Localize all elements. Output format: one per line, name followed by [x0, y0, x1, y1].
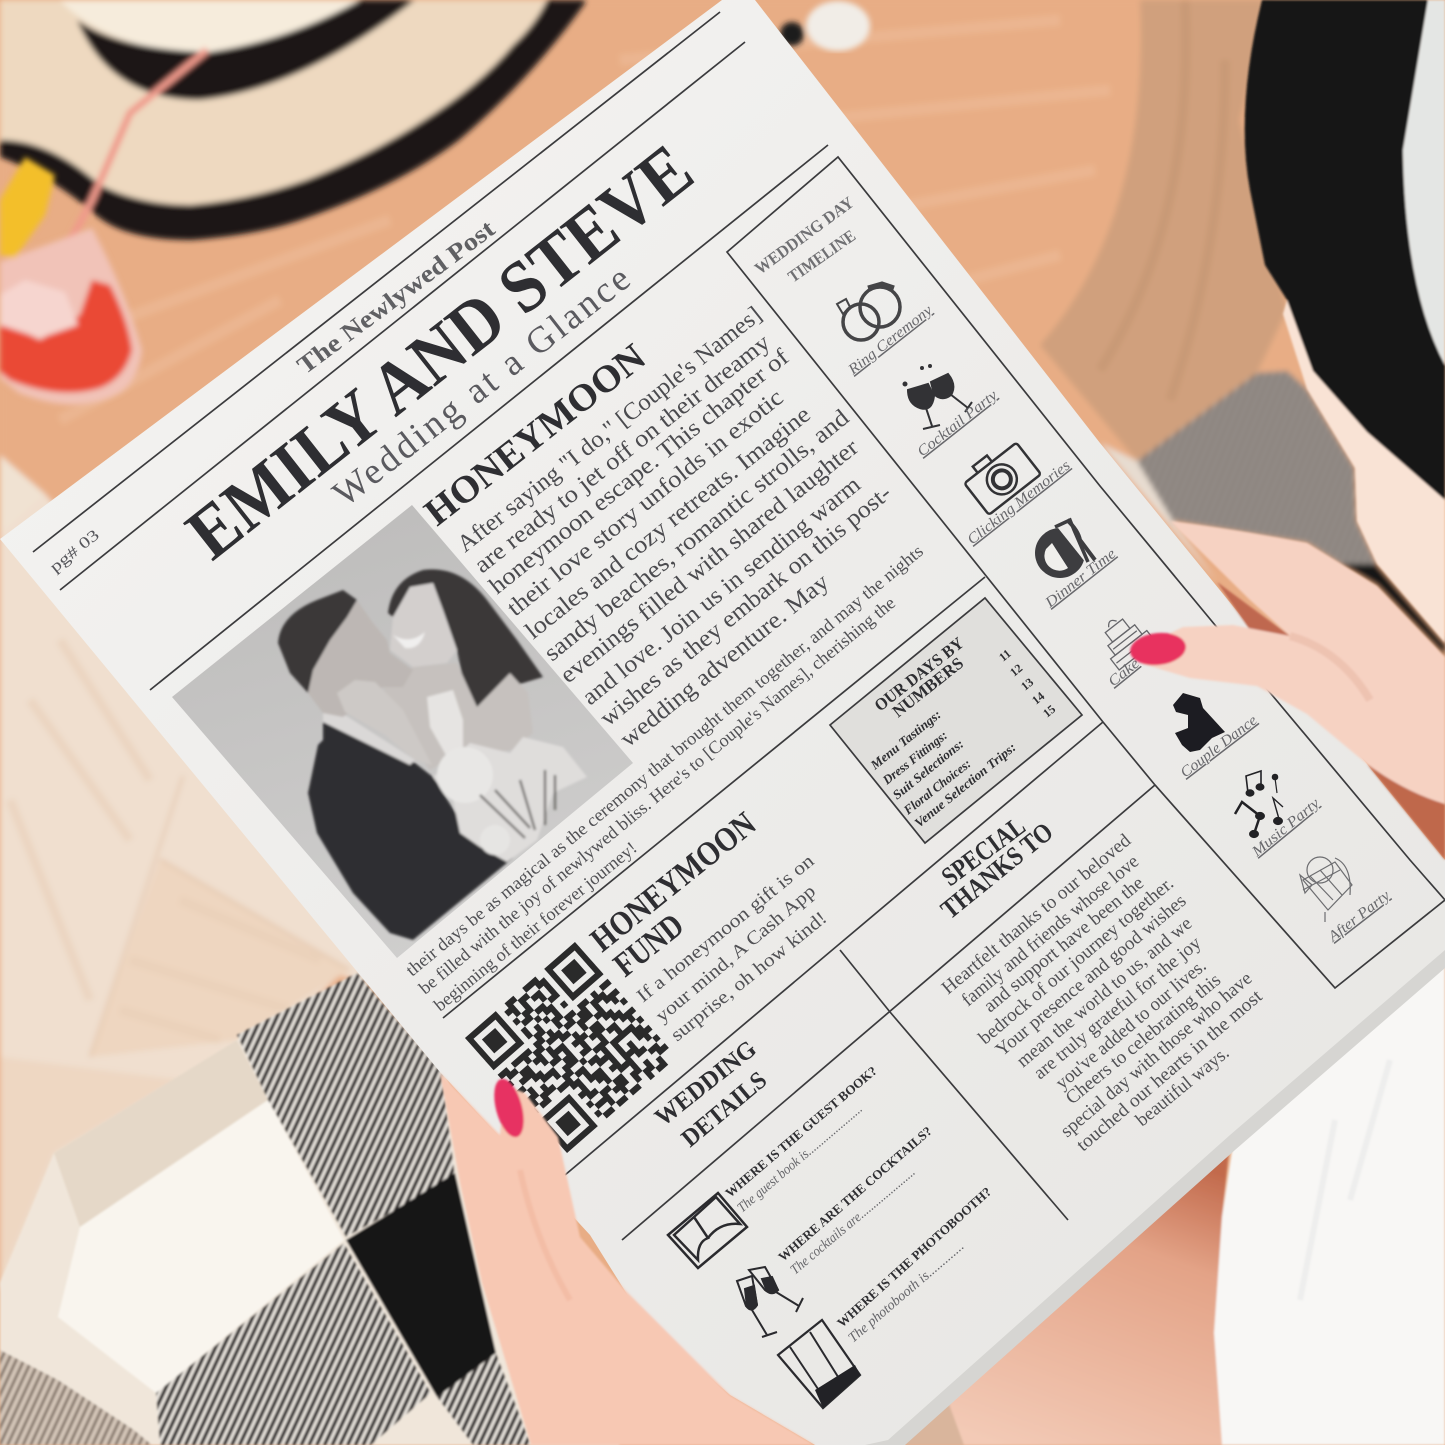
left hand with thumb — [440, 1073, 815, 1445]
cocktails item: WHERE ARE THE COCKTAILS? — [775, 1123, 935, 1264]
numbers heading: NUMBERS — [889, 654, 967, 721]
man's suit — [308, 718, 513, 940]
icon: couple dancing — [1173, 693, 1225, 752]
numbers list: 13 — [1018, 675, 1036, 693]
article text: honeymoon: evenings filled with shared laughter — [555, 435, 864, 689]
fund heading: FUND — [607, 907, 691, 984]
woman's face — [390, 583, 457, 667]
thanks text: you've added to our lives. — [1052, 955, 1211, 1094]
numbers list — [867, 646, 1058, 830]
guest book item: WHERE IS THE GUEST BOOK? — [722, 1063, 880, 1200]
panel: our days by numbers — [830, 598, 1082, 843]
photobooth item: The photobooth is............. — [846, 1239, 967, 1346]
article text: honeymoon: sandy beaches, romantic strolls, and — [539, 405, 854, 667]
table token — [780, 1, 870, 51]
article text: honeymoon: their love story unfolds in exotic — [502, 385, 788, 622]
article text: continuation: be filled with the joy of newlywed bliss. Here's to [Couple's Names], cherishing the — [415, 593, 899, 998]
panel: wedding day timeline — [727, 157, 1445, 988]
timeline heading: TIMELINE — [784, 226, 859, 286]
bouquet — [433, 737, 587, 862]
article text: continuation: their days be as magical as the ceremony that brought them together, and may the nights — [402, 541, 927, 980]
label: after party: After Party — [1325, 888, 1393, 946]
article text: honeymoon: honeymoon escape. This chapter of — [484, 344, 794, 600]
fund text: If a honeymoon gift is on — [633, 850, 819, 1007]
article text: honeymoon: and love. Join us in sending warm — [577, 472, 866, 711]
icon: rings — [837, 284, 900, 340]
arm and shirt — [899, 955, 1445, 1445]
fund text: surprise, oh how kind! — [667, 908, 831, 1046]
icon: photobooth — [778, 1320, 860, 1408]
numbers list: Menu Tastings: — [867, 707, 944, 773]
thanks text: are truly grateful for the joy — [1030, 932, 1206, 1084]
label: dinner time: Dinner Time — [1042, 546, 1119, 612]
masthead: The Newlywed Post — [292, 215, 501, 380]
thanks text: bedrock of our journey together. — [975, 873, 1178, 1049]
icon: book — [668, 1193, 747, 1268]
title: EMILY AND STEVE — [172, 129, 708, 575]
timeline heading: WEDDING DAY — [751, 193, 857, 278]
thanks text: family and friends whose love — [958, 851, 1143, 1011]
numbers list: 12 — [1007, 661, 1025, 679]
woman's arm and shoulder — [383, 663, 533, 770]
label: ring ceremony: Ring Ceremony — [845, 302, 936, 379]
hand on cheek — [337, 680, 432, 765]
thanks heading: SPECIAL — [936, 811, 1031, 892]
fund heading: HONEYMOON — [584, 805, 763, 959]
hat — [0, 0, 585, 267]
fund text — [633, 850, 831, 1046]
article text: honeymoon — [453, 302, 897, 753]
header rules — [33, 12, 1155, 1240]
thanks text: mean the world to us, and we — [1013, 913, 1196, 1072]
numbers list: Suit Selections: — [889, 736, 966, 802]
label: cocktail party: Cocktail Party — [915, 387, 1001, 460]
numbers heading: OUR DAYS BY — [871, 633, 967, 715]
thanks text — [938, 830, 1267, 1156]
thanks text: and support have been the — [980, 873, 1148, 1017]
woman's hair — [388, 569, 543, 707]
right hand with thumb — [1128, 521, 1445, 860]
panel: wedding details — [650, 1036, 994, 1408]
numbers list: Floral Choices: — [900, 756, 974, 818]
page number: pg# 03 — [47, 527, 103, 576]
blanket — [0, 973, 620, 1445]
couple photo — [172, 505, 633, 958]
woman's hair and neck — [1245, 0, 1445, 643]
icon: camera — [959, 436, 1041, 515]
drink — [0, 157, 142, 405]
thanks text: special day with those who have — [1057, 968, 1256, 1142]
photobooth item: WHERE IS THE PHOTOBOOTH? — [834, 1184, 994, 1330]
numbers list: 11 — [996, 646, 1014, 664]
icon: cake — [1092, 607, 1155, 670]
icon: after party — [1300, 857, 1352, 922]
article text: continuation: beginning of their forever journey! — [430, 837, 641, 1015]
thanks text: Cheers to celebrating this — [1062, 969, 1225, 1109]
numbers list: 14 — [1029, 689, 1047, 707]
heading: honeymoon: HONEYMOON — [417, 336, 654, 534]
man's hair — [278, 590, 357, 693]
man's face — [308, 600, 413, 717]
woman's dress — [427, 690, 463, 757]
QR code — [467, 944, 675, 1151]
thanks text: beautiful ways. — [1132, 1042, 1233, 1131]
numbers list: Dress Fittings: — [879, 727, 950, 788]
details heading: WEDDING — [650, 1036, 762, 1132]
thanks text: Your presence and good wishes — [992, 890, 1190, 1061]
thanks heading: THANKS TO — [935, 816, 1059, 925]
article text: honeymoon: After saying "I do," [Couple's Names] — [453, 302, 767, 558]
fund text: your mind, A Cash App — [652, 881, 820, 1027]
guest book item: The guest book is...................... — [735, 1102, 866, 1216]
icon: music notes — [1235, 771, 1283, 838]
label: music party: Music Party — [1249, 795, 1323, 861]
article text: honeymoon: wishes as they embark on this post- — [595, 480, 897, 732]
fund heading — [584, 805, 763, 984]
cocktails item: The cocktails are...................... — [788, 1165, 918, 1278]
article text: honeymoon: wedding adventure. May — [615, 569, 834, 753]
icon: dinner plate — [1035, 516, 1100, 578]
panel: special thanks — [935, 811, 1267, 1156]
details heading: DETAILS — [677, 1067, 772, 1153]
numbers list: Venue Selection Trips: — [911, 739, 1019, 830]
numbers list: 15 — [1040, 702, 1058, 720]
thanks text: touched our hearts in the most — [1073, 985, 1267, 1156]
article text: honeymoon: are ready to jet off on their dreamy — [470, 330, 775, 579]
label: clicking memories: Clicking Memories — [965, 458, 1074, 548]
icon: champagne flutes — [737, 1267, 803, 1337]
subtitle: Wedding at a Glance — [325, 258, 638, 515]
label: couple dance: Couple Dance — [1178, 712, 1261, 781]
thanks text: Heartfelt thanks to our beloved — [938, 830, 1135, 999]
label: cake: Cake — [1105, 655, 1143, 690]
icon: wine glasses — [904, 365, 972, 429]
article text: honeymoon: locales and cozy retreats. Imagine — [521, 402, 816, 645]
panel: honeymoon fund — [467, 805, 831, 1151]
